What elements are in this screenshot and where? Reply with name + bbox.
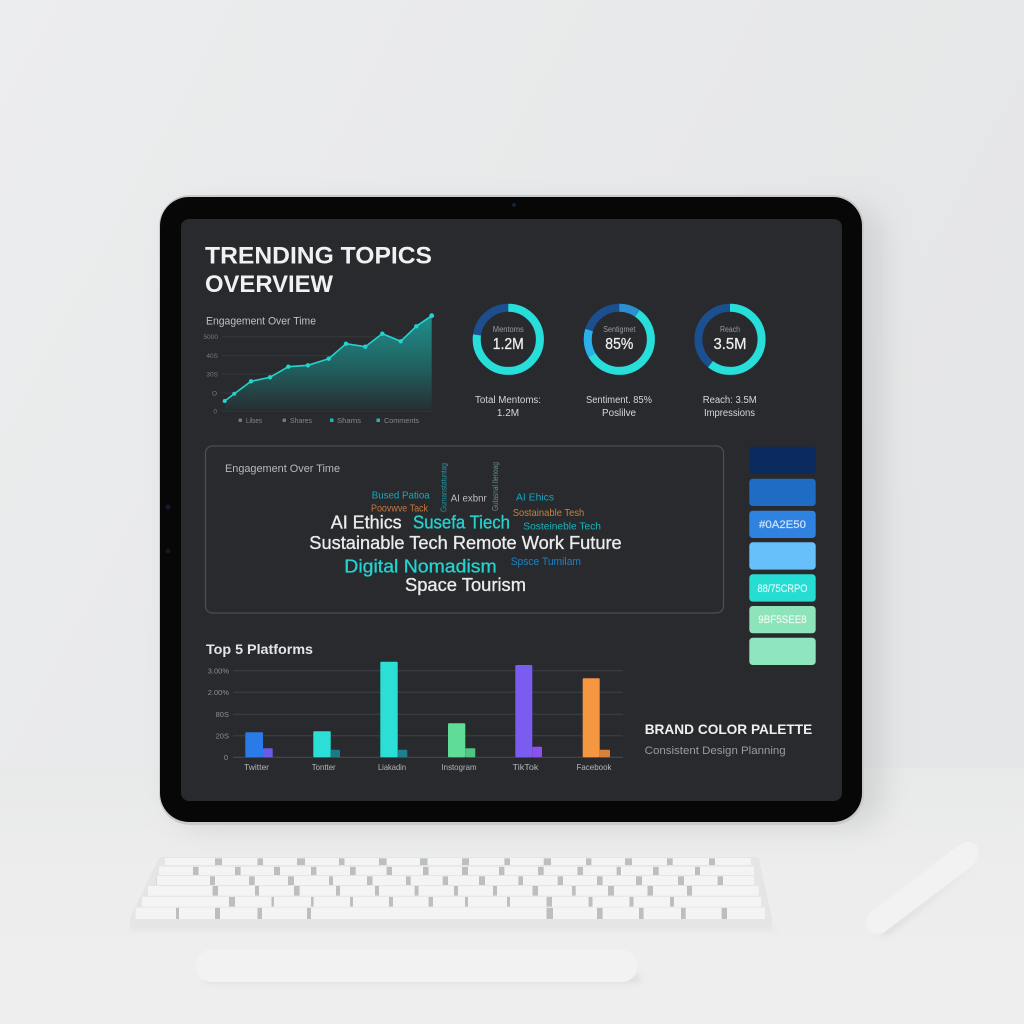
title xyxy=(205,242,432,298)
word cloud heading: Engagement Over Time xyxy=(225,463,340,475)
panel: colour swatches: 9BF5SEE8 xyxy=(758,614,807,626)
small words: Sosteineble Tech xyxy=(523,520,601,532)
donut: total mentions: Total Mentoms: xyxy=(475,395,541,406)
vertical words xyxy=(438,462,500,512)
large words: Susefa Tiech xyxy=(413,512,510,532)
chart grid xyxy=(222,337,432,411)
donut: total mentions: 1.2M xyxy=(497,408,519,419)
platform labels: Twitter xyxy=(244,762,269,772)
platform labels xyxy=(244,762,612,772)
y axis labels: 30S xyxy=(206,372,219,378)
platform labels: Facebook xyxy=(576,762,612,772)
chart heading: Engagement Over Time xyxy=(206,316,316,328)
donut: reach: 3.5M xyxy=(714,336,746,353)
platform labels: Instogram xyxy=(442,762,476,772)
y axis labels xyxy=(204,334,219,416)
vertical words: Gumanstatuntag xyxy=(438,463,448,512)
large words: Digital Nomadism xyxy=(344,556,497,576)
chart legend: Lilses xyxy=(246,416,262,425)
y axis labels: 0 xyxy=(224,753,228,762)
y axis labels: 20S xyxy=(216,732,229,740)
large words: Sustainable Tech Remote Work Future xyxy=(309,533,622,553)
small words: AI exbnr xyxy=(451,493,487,505)
chart legend: Shares xyxy=(290,416,312,425)
brand colour palette caption xyxy=(645,721,812,757)
donut: reach: Impressions xyxy=(704,408,755,419)
y axis labels: 3.00% xyxy=(208,666,229,676)
y axis labels: 80S xyxy=(216,710,229,719)
chart legend: Shams xyxy=(337,416,361,425)
panel: word cloud xyxy=(206,446,724,613)
donut: sentiment: 85% xyxy=(605,336,633,353)
y axis labels: 40S xyxy=(206,353,219,360)
small words xyxy=(371,490,601,568)
vertical words: Gutasnal Ilenoag xyxy=(490,462,500,511)
keyboard xyxy=(130,857,776,930)
wrist rest xyxy=(196,950,640,983)
panel: bar chart xyxy=(206,641,623,772)
y axis labels: O xyxy=(212,390,217,398)
small words: Poovwve Tack xyxy=(371,504,429,515)
donut: total mentions: 1.2M xyxy=(493,336,524,353)
small words: AI Ehics xyxy=(516,492,554,504)
y axis labels: 2.00% xyxy=(208,688,229,697)
key rows xyxy=(136,858,765,919)
donut: reach: Reach: 3.5M xyxy=(703,395,757,406)
y axis labels: 5000 xyxy=(204,334,218,341)
small words: Bused Patioa xyxy=(372,490,430,502)
panel: colour swatches: 88/75CRPO xyxy=(758,583,808,595)
title: TRENDING TOPICS xyxy=(205,242,432,270)
donut: total mentions: Mentoms xyxy=(493,325,524,334)
chart legend xyxy=(238,416,419,425)
platform labels: TikTok xyxy=(512,762,539,772)
line and points xyxy=(223,313,434,403)
area fill xyxy=(225,316,432,411)
donut: sentiment xyxy=(586,308,652,419)
bar chart heading: Top 5 Platforms xyxy=(206,641,313,657)
stylus xyxy=(866,842,978,936)
panel: colour swatches xyxy=(749,447,816,665)
donut: sentiment: Sentiment. 85% xyxy=(586,395,652,406)
bar chart grid xyxy=(233,671,623,757)
panel: engagement line chart xyxy=(204,313,434,425)
brand colour palette caption: Consistent Design Planning xyxy=(645,745,786,757)
brand colour palette caption: BRAND COLOR PALETTE xyxy=(645,721,812,737)
large words xyxy=(309,512,622,595)
bars xyxy=(245,662,610,757)
donut: reach: Reach xyxy=(720,325,740,334)
large words: Space Tourism xyxy=(405,575,526,595)
y axis labels xyxy=(208,666,229,762)
tablet device xyxy=(159,195,884,828)
chart legend: Comments xyxy=(384,416,419,425)
small words: Sostainable Tesh xyxy=(513,507,584,519)
donut: total mentions xyxy=(475,308,541,419)
y axis labels: 0 xyxy=(213,408,217,416)
large words: AI Ethics xyxy=(331,512,402,532)
donut: reach xyxy=(698,308,762,419)
title: OVERVIEW xyxy=(205,271,334,298)
small words: Spsce Tumilam xyxy=(511,556,581,568)
donut: sentiment: Sentigmet xyxy=(603,325,636,334)
platform labels: Tontter xyxy=(312,762,336,772)
panel: colour swatches: #0A2E50 xyxy=(759,519,806,531)
donut: sentiment: Poslilve xyxy=(602,408,636,419)
platform labels: Liakadin xyxy=(378,762,406,772)
